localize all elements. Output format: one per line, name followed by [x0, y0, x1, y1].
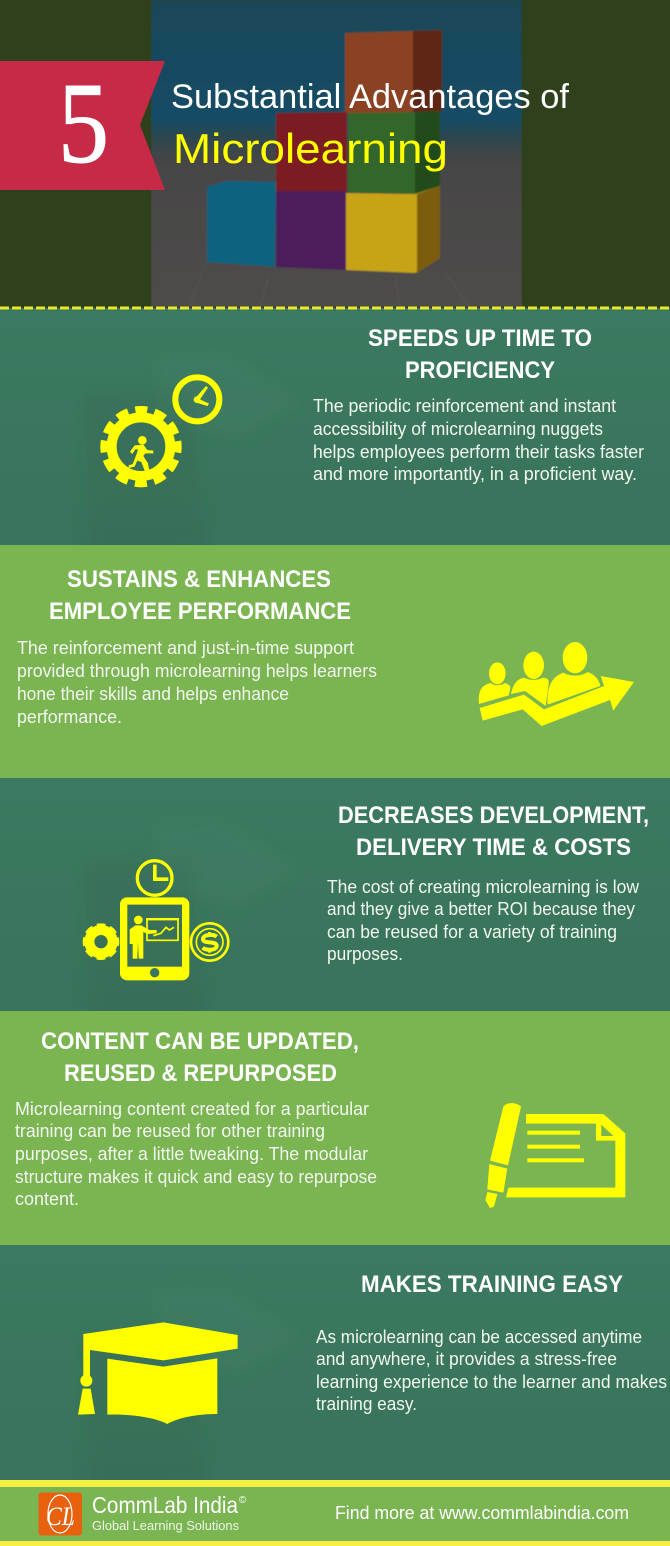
body text: training can be reused for other training [15, 1121, 325, 1141]
icon: graduation cap [78, 1322, 238, 1424]
heading: DELIVERY TIME & COSTS [356, 834, 631, 861]
body text: can be reused for a variety of training [327, 922, 617, 942]
body text: As microlearning can be accessed anytime [316, 1327, 642, 1347]
panel: sustains and enhances employee performance [0, 545, 670, 778]
body text: and anywhere, it provides a stress-free [316, 1349, 617, 1369]
body text: helps employees perform their tasks faster [313, 442, 644, 462]
body text: The reinforcement and just-in-time support [17, 638, 354, 658]
body text [17, 638, 377, 727]
website link text: Find more at www.commlabindia.com [335, 1503, 629, 1523]
heading [338, 802, 649, 861]
ribbon with number 5 [0, 60, 165, 190]
icon: pen and document [485, 1103, 625, 1208]
heading: EMPLOYEE PERFORMANCE [49, 598, 351, 625]
body text: The cost of creating microlearning is low [327, 877, 640, 897]
icon: three people with rising arrow [479, 642, 634, 726]
title [171, 78, 570, 172]
body text: performance. [17, 707, 122, 727]
logo wordmark: CommLab India [92, 1492, 238, 1518]
heading [368, 325, 592, 384]
panel: speeds up time to proficiency [0, 310, 670, 560]
body text: and they give a better ROI because they [327, 899, 635, 919]
heading: SUSTAINS & ENHANCES [67, 566, 331, 593]
body text: accessibility of microlearning nuggets [313, 419, 603, 439]
heading [49, 566, 351, 625]
heading: PROFICIENCY [405, 357, 555, 384]
photo: stacked coloured blocks [151, 0, 522, 307]
panel: content can be updated, reused and repurposed [0, 1011, 670, 1245]
icon: gear, runner and clock [104, 377, 219, 484]
body text: purposes. [327, 944, 403, 964]
heading: MAKES TRAINING EASY [361, 1271, 623, 1298]
body text: content. [15, 1189, 79, 1209]
logo mark: CL [46, 1502, 75, 1531]
body text [313, 396, 644, 484]
logo wordmark: Global Learning Solutions [92, 1518, 239, 1533]
ribbon with number 5: 5 [58, 60, 109, 188]
body text: and more importantly, in a proficient way. [313, 464, 637, 484]
footer [0, 1480, 670, 1546]
heading [41, 1028, 359, 1087]
panel: makes training easy [0, 1245, 670, 1495]
body text [327, 877, 640, 964]
heading: SPEEDS UP TIME TO [368, 325, 592, 352]
body text: hone their skills and helps enhance [17, 684, 289, 704]
body text: structure makes it quick and easy to repurpose [15, 1167, 377, 1187]
body text [316, 1327, 667, 1414]
title: Substantial Advantages of [171, 78, 570, 116]
panel: decreases development, delivery time and costs [0, 778, 670, 1028]
title: Microlearning [173, 125, 448, 172]
body text: provided through microlearning helps learners [17, 661, 377, 681]
logo wordmark [92, 1492, 247, 1533]
body text: purposes, after a little tweaking. The modular [15, 1144, 368, 1164]
body text: learning experience to the learner and makes [316, 1372, 667, 1392]
heading: CONTENT CAN BE UPDATED, [41, 1028, 359, 1055]
body text [15, 1099, 377, 1209]
heading: REUSED & REPURPOSED [64, 1060, 337, 1087]
logo wordmark: © [239, 1495, 247, 1506]
header banner [0, 0, 670, 308]
logo mark [38, 1492, 82, 1536]
body text: Microlearning content created for a particular [15, 1099, 369, 1119]
body text: training easy. [316, 1394, 417, 1414]
body text: The periodic reinforcement and instant [313, 396, 616, 416]
icon: tablet with presenter, clock, gear and dollar coin [85, 861, 228, 977]
